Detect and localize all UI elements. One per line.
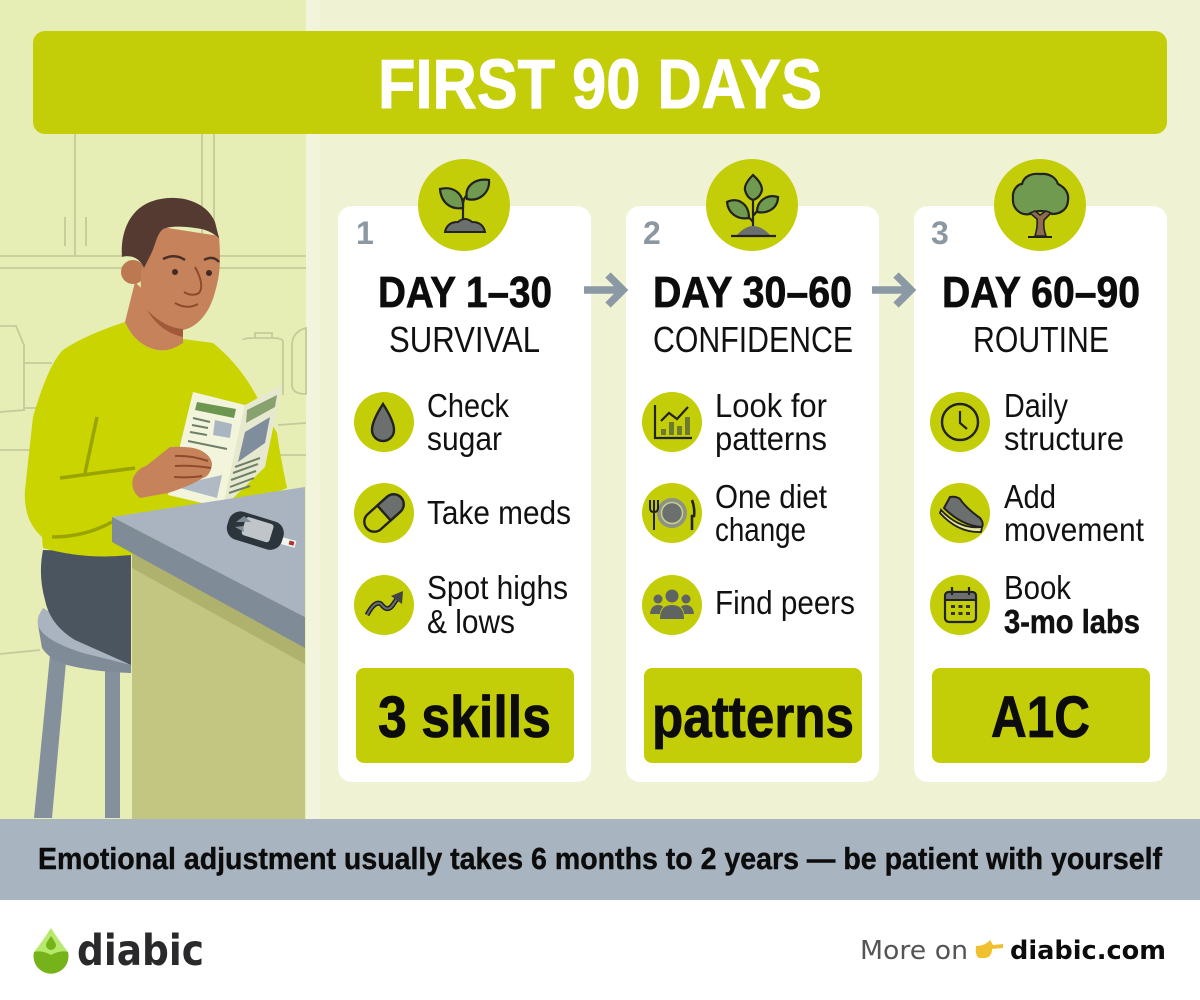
stool [34, 608, 131, 818]
item: find peers [642, 575, 855, 635]
item: book labs: 3-mo labs [1004, 603, 1140, 640]
glucose meter [224, 508, 296, 553]
item: add movement: Add [1004, 478, 1056, 515]
bottom message band [0, 819, 1200, 900]
heading: DAY 30–60 [653, 268, 852, 317]
footer link: More on [860, 936, 968, 966]
heading: DAY 60–90 [942, 268, 1140, 317]
key takeaway [356, 668, 574, 763]
item: take meds: Take meds [427, 494, 571, 531]
icon: young plant [706, 159, 798, 251]
trousers [41, 550, 131, 665]
key takeaway: A1C [991, 685, 1090, 750]
title: FIRST 90 DAYS [378, 45, 822, 123]
item: look for patterns: patterns [715, 420, 827, 457]
item: daily structure: Daily [1004, 387, 1068, 424]
item: one diet change: One diet [715, 478, 827, 515]
footer link: diabic.com [1010, 936, 1166, 966]
kitchen background lines [0, 130, 306, 654]
logo: diabic: diabic [77, 926, 204, 976]
arrow: step 2 to 3 [872, 275, 911, 305]
illustration: man reading at counter [0, 0, 306, 819]
hand [132, 447, 212, 498]
footer link [860, 936, 1166, 966]
title banner [33, 31, 1167, 134]
item: take meds [354, 483, 571, 543]
head [121, 198, 220, 350]
arrow: step 1 to 2 [584, 275, 623, 305]
item: check sugar: sugar [427, 420, 502, 457]
item: one diet change: change [715, 511, 806, 548]
item: find peers: Find peers [715, 584, 855, 621]
item: daily structure [930, 387, 1124, 457]
heading: DAY 1–30 [378, 268, 552, 317]
item: add movement [930, 478, 1144, 548]
subheading: SURVIVAL [389, 319, 540, 360]
panel: day 60-90 [914, 159, 1167, 782]
icon: pointing hand [976, 940, 1003, 958]
item: book labs [930, 569, 1140, 640]
booklet [168, 385, 282, 508]
item: look for patterns [642, 387, 827, 457]
item: spot highs and lows [354, 569, 568, 640]
item: one diet change [642, 478, 827, 548]
counter cabinet [132, 550, 305, 819]
item: look for patterns: Look for [715, 387, 827, 424]
icon: tree [994, 159, 1086, 251]
item: spot highs and lows: & lows [427, 603, 515, 640]
key takeaway [932, 668, 1150, 763]
step number: 1 [356, 215, 374, 251]
key takeaway: 3 skills [378, 685, 551, 750]
item: daily structure: structure [1004, 420, 1124, 457]
step number: 2 [643, 215, 661, 251]
item: check sugar: Check [427, 387, 509, 424]
step number: 3 [931, 215, 949, 251]
icon: seedling [418, 159, 510, 251]
item: check sugar [354, 387, 509, 457]
key takeaway [644, 668, 862, 763]
key takeaway: patterns [652, 685, 854, 750]
item: spot highs and lows: Spot highs [427, 569, 568, 606]
sweater [25, 322, 287, 556]
subheading: CONFIDENCE [653, 319, 853, 360]
subheading: ROUTINE [973, 319, 1109, 360]
panel: day 30-60 [626, 159, 879, 782]
panel: day 1-30 [338, 159, 591, 782]
logo: diabic [34, 926, 204, 976]
item: add movement: movement [1004, 511, 1144, 548]
counter top [112, 487, 305, 648]
item: book labs: Book [1004, 569, 1071, 606]
